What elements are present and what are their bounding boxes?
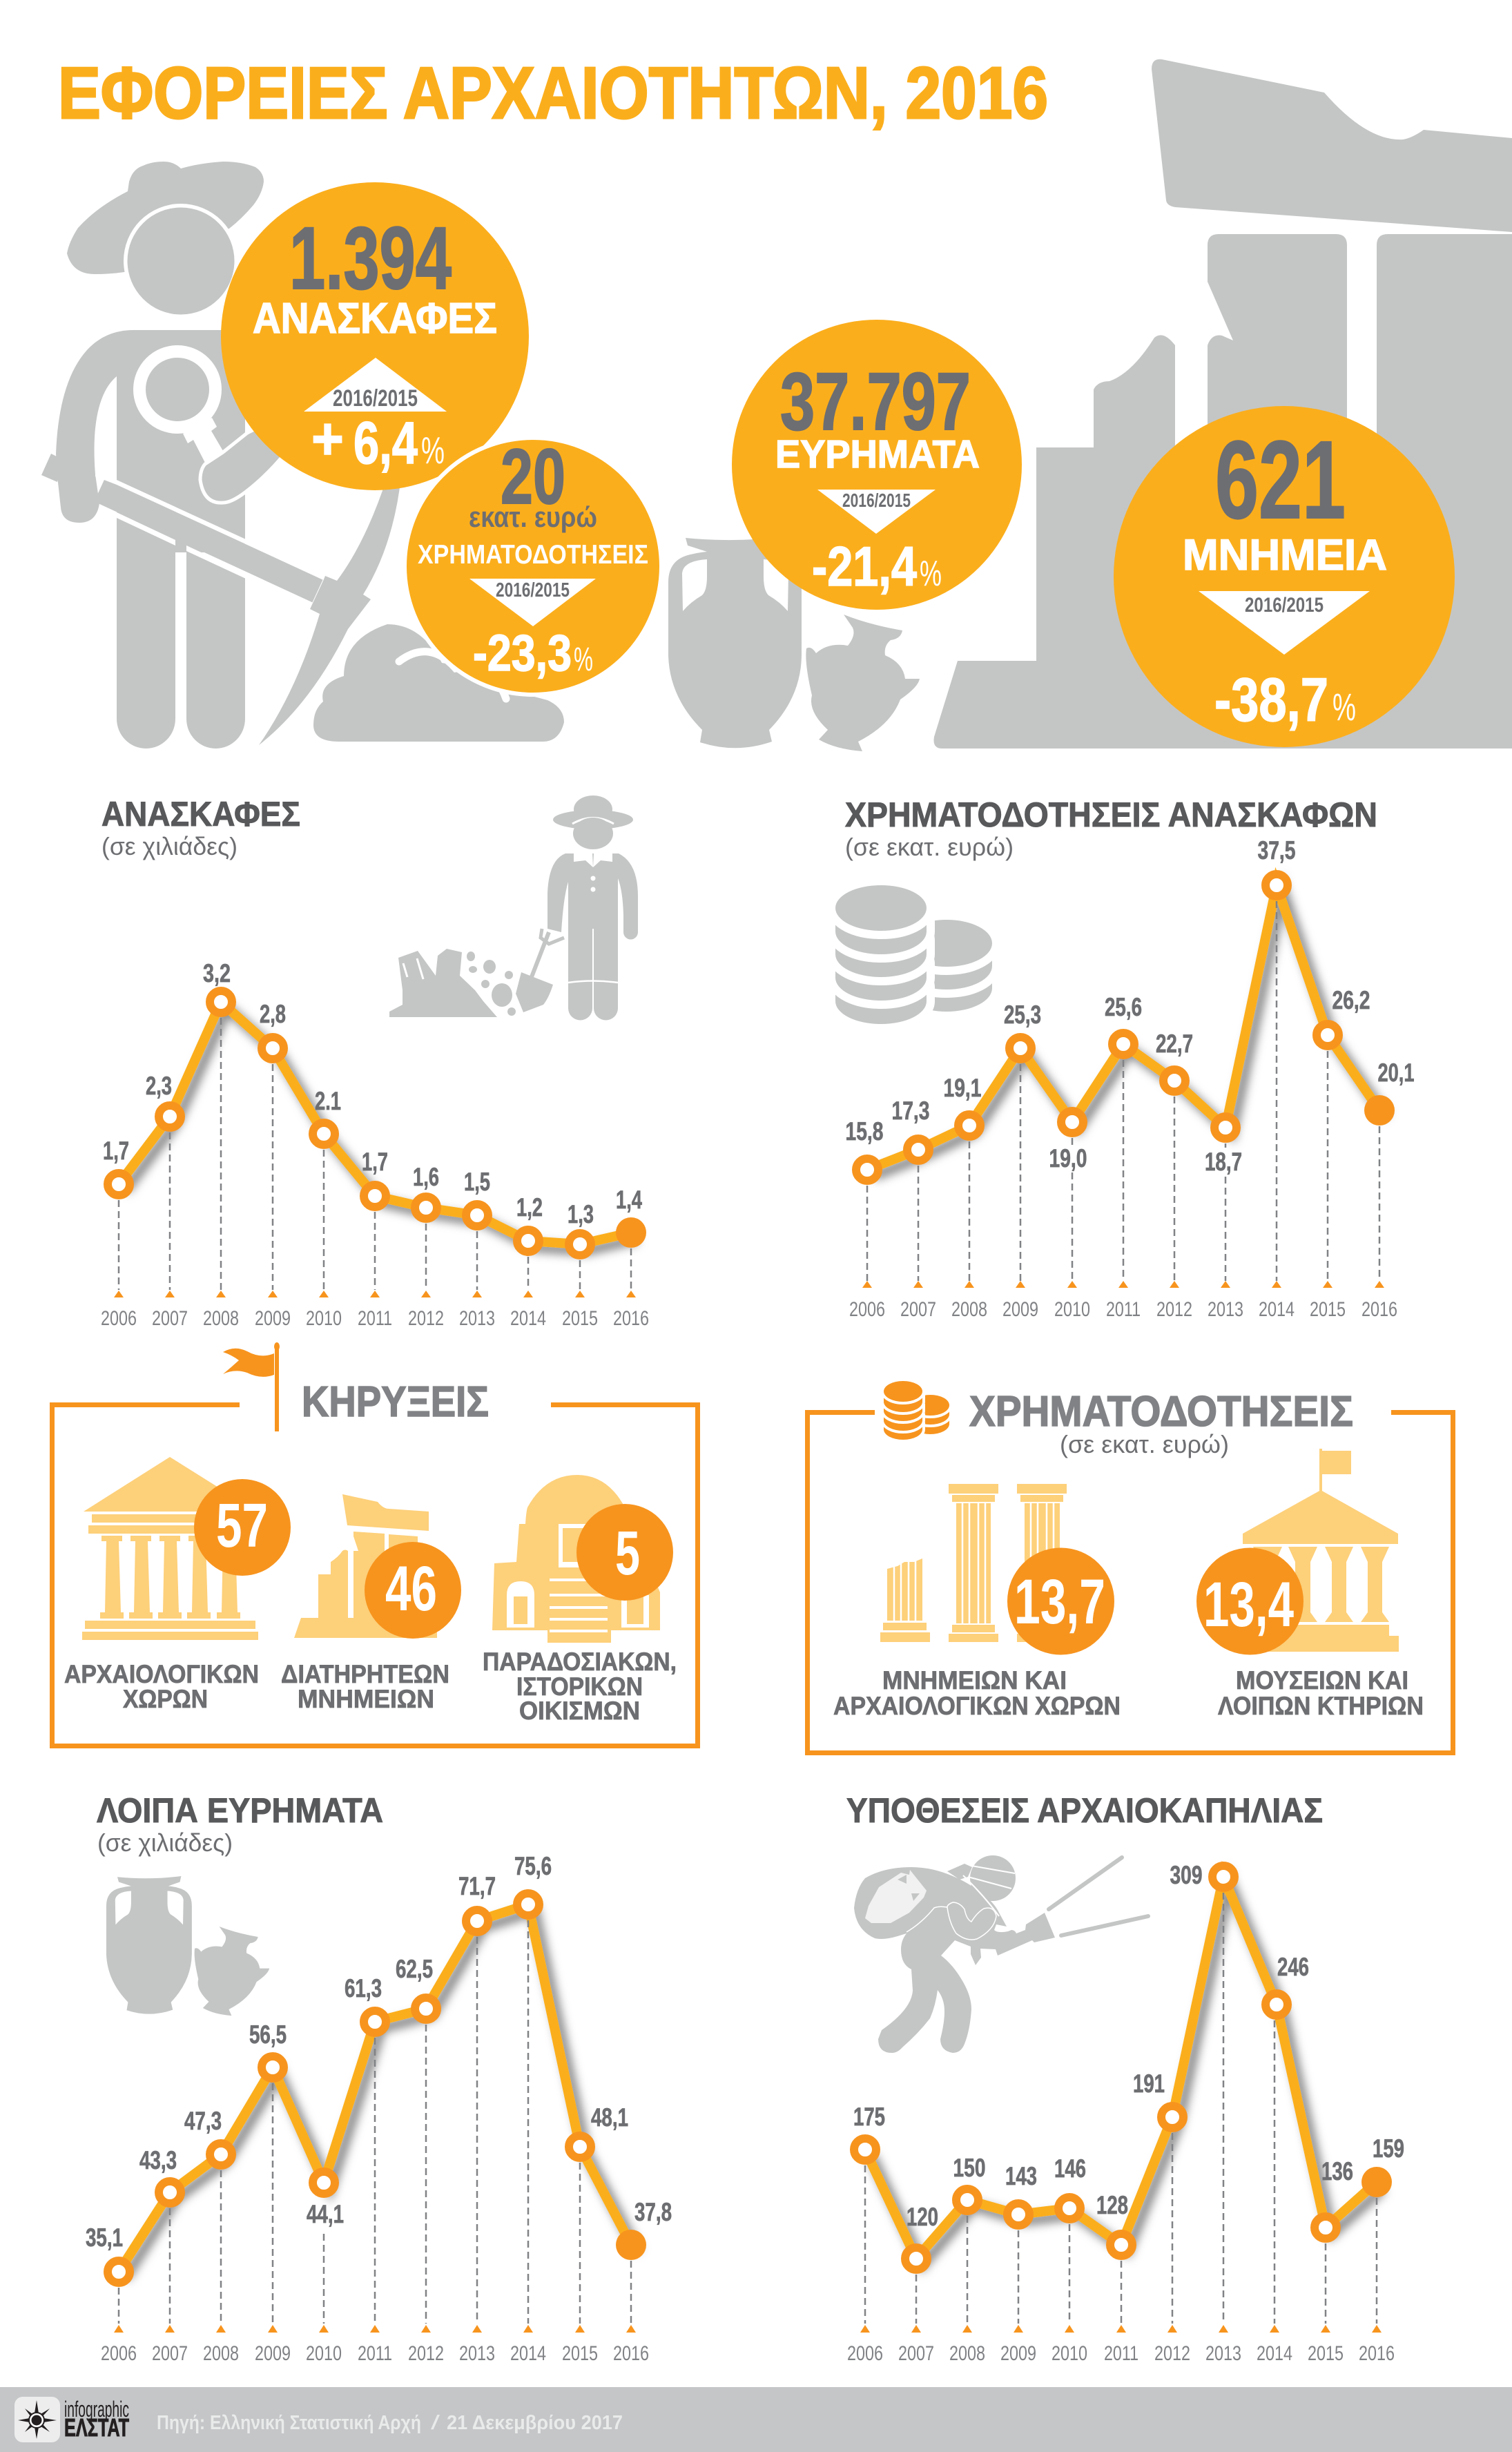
value labels: 61,3	[345, 1974, 382, 2002]
logo: ELSTAT infographic: ΕΛΣΤΑΤ	[64, 2413, 129, 2442]
year axis: 2009	[255, 2342, 291, 2365]
value labels: 146	[1054, 2154, 1086, 2183]
value labels: 1,5	[464, 1168, 490, 1196]
caption: museums and other buildings: ΜΟΥΣΕΙΩΝ ΚΑΙ	[1236, 1666, 1408, 1695]
value labels: 37,8	[634, 2198, 672, 2226]
year axis: 2010	[1051, 2342, 1087, 2365]
icon: digger with shovel	[389, 795, 638, 1021]
year axis: 2006	[847, 2342, 883, 2365]
heading: ΚΗΡΥΞΕΙΣ	[302, 1378, 489, 1426]
value labels: 120	[907, 2203, 938, 2231]
line series	[865, 1877, 1377, 2259]
line series	[119, 1904, 631, 2272]
stat circle: funding	[405, 433, 661, 695]
value labels: 309	[1170, 1861, 1203, 1889]
value labels: 47,3	[184, 2107, 222, 2135]
year axis: 2012	[408, 1307, 444, 1330]
caption: archaeological sites: ΧΩΡΩΝ	[123, 1685, 208, 1713]
badge: 46: 46	[385, 1554, 437, 1624]
year axis: 2007	[152, 2342, 188, 2365]
badge: 57	[194, 1479, 291, 1576]
icon: tilted jar	[806, 615, 920, 751]
icon: orange coins	[884, 1381, 949, 1440]
value labels: 19,0	[1049, 1144, 1087, 1172]
year axis: 2011	[358, 2342, 392, 2365]
heading: ΑΝΑΣΚΑΦΕΣ	[101, 795, 300, 833]
stat circle: finds: -21,4	[812, 536, 917, 598]
logo: ELSTAT infographic: infographic	[64, 2397, 129, 2422]
year axis: 2008	[949, 2342, 985, 2365]
stat circle: finds: ΕΥΡΗΜΑΤΑ	[775, 432, 980, 476]
value labels: 25,3	[1004, 1001, 1041, 1029]
icon: archaeologist with pickaxe	[41, 162, 401, 749]
unit note: (σε χιλιάδες)	[101, 832, 238, 860]
stat circle: monuments: %	[1332, 685, 1356, 728]
icon: museum	[1243, 1449, 1399, 1652]
year axis: 2013	[459, 1307, 495, 1330]
icon: flag	[223, 1342, 280, 1431]
year axis: 2010	[306, 2342, 342, 2365]
unit note: (σε χιλιάδες)	[97, 1828, 233, 1857]
chart: excavation funding	[835, 795, 1414, 1321]
heading: ΧΡΗΜΑΤΟΔΟΤΗΣΕΙΣ ΑΝΑΣΚΑΦΩΝ	[845, 795, 1377, 834]
icon: columns	[880, 1484, 1067, 1642]
value labels: 2,3	[146, 1072, 172, 1100]
panel: designations	[52, 1342, 697, 1746]
year axis: 2015	[1310, 1298, 1346, 1321]
badge: 5	[576, 1504, 673, 1601]
icon: temple	[82, 1457, 258, 1640]
year axis	[849, 1298, 1397, 1321]
value labels: 20,1	[1378, 1059, 1414, 1087]
value labels: 1,7	[362, 1148, 388, 1176]
year axis: 2015	[562, 1307, 598, 1330]
year axis: 2008	[203, 1307, 239, 1330]
drop lines	[119, 1920, 631, 2324]
value labels: 19,1	[943, 1074, 982, 1102]
value labels: 159	[1373, 2134, 1404, 2163]
stat circle: funding: 20	[501, 433, 565, 520]
year axis: 2015	[1308, 2342, 1344, 2365]
badge: 46	[365, 1542, 461, 1639]
year axis: 2015	[562, 2342, 598, 2365]
year axis: 2016	[613, 1307, 649, 1330]
stat circle: excavations: 1.394	[289, 209, 452, 308]
caption: traditional settlements: ΙΣΤΟΡΙΚΩΝ	[516, 1672, 643, 1701]
axis ticks	[860, 2325, 1382, 2333]
year axis: 2016	[1359, 2342, 1395, 2365]
unit note: (σε εκατ. ευρώ)	[1060, 1430, 1229, 1458]
year axis: 2012	[1154, 2342, 1190, 2365]
panel frame	[52, 1404, 697, 1746]
year axis: 2006	[101, 2342, 137, 2365]
chart: other finds	[86, 1791, 672, 2365]
year axis: 2014	[1259, 1298, 1295, 1321]
stat circle: funding: %	[574, 641, 593, 678]
axis ticks	[114, 1291, 636, 1297]
value labels: 37,5	[1258, 836, 1295, 865]
value labels: 1,6	[413, 1163, 439, 1191]
stat circle: finds: 2016/2015	[842, 490, 911, 511]
icon: tilted jar	[195, 1927, 269, 2016]
year axis: 2008	[951, 1298, 987, 1321]
value labels: 136	[1321, 2157, 1353, 2185]
badge: 5: 5	[615, 1519, 640, 1588]
markers	[108, 1893, 646, 2283]
stat circle: funding: ΧΡΗΜΑΤΟΔΟΤΗΣΕΙΣ	[418, 540, 648, 570]
caption: museums and other buildings: ΛΟΙΠΩΝ ΚΤΗΡΙΩΝ	[1218, 1692, 1424, 1720]
icon: ruined temple	[933, 59, 1512, 749]
caption: listed monuments: ΜΝΗΜΕΙΩΝ	[298, 1685, 434, 1713]
axis ticks	[862, 1281, 1384, 1288]
source line: 21 Δεκεμβρίου 2017	[447, 2412, 623, 2434]
year axis: 2011	[1106, 1298, 1141, 1321]
source line: /	[431, 2412, 441, 2434]
value labels: 35,1	[86, 2223, 123, 2252]
year axis: 2012	[408, 2342, 444, 2365]
stat circle: funding: εκατ. ευρώ	[469, 501, 597, 533]
value labels	[853, 1861, 1404, 2231]
stat circle: excavations: 6,4	[353, 410, 418, 476]
panel frame	[808, 1413, 1453, 1753]
stat circle: excavations: 2016/2015	[333, 385, 418, 412]
markers	[854, 1866, 1392, 2270]
stat circle: excavations: ΑΝΑΣΚΑΦΕΣ	[253, 295, 497, 342]
year axis: 2016	[1361, 1298, 1397, 1321]
value labels: 15,8	[845, 1117, 884, 1146]
value labels: 26,2	[1332, 986, 1370, 1014]
value labels: 1,3	[568, 1200, 594, 1228]
value labels: 56,5	[249, 2020, 287, 2049]
year axis: 2007	[900, 1298, 936, 1321]
value labels: 246	[1277, 1953, 1309, 1981]
icon: amphora	[106, 1876, 192, 2014]
year axis: 2012	[1156, 1298, 1192, 1321]
icon: ruined monument	[294, 1494, 437, 1638]
value labels: 48,1	[591, 2103, 628, 2132]
value labels: 128	[1096, 2191, 1128, 2219]
year axis: 2010	[306, 1307, 342, 1330]
caption: museums and other buildings	[1218, 1666, 1424, 1720]
caption: listed monuments: ΔΙΑΤΗΡΗΤΕΩΝ	[281, 1660, 449, 1688]
stat circle: monuments: 2016/2015	[1245, 594, 1324, 617]
year axis	[101, 1307, 649, 1330]
year axis	[847, 2342, 1395, 2365]
chart: antiquities trafficking cases	[846, 1791, 1404, 2365]
stat circle: monuments: ΜΝΗΜΕΙΑ	[1183, 531, 1387, 579]
value labels: 22,7	[1156, 1030, 1193, 1058]
icon: thief with bolt cutter and sack	[854, 1855, 1148, 2053]
year axis: 2009	[1000, 2342, 1036, 2365]
year axis: 2013	[459, 2342, 495, 2365]
stat circle: finds: %	[920, 554, 942, 594]
caption: traditional settlements: ΟΙΚΙΣΜΩΝ	[519, 1697, 640, 1725]
value labels: 75,6	[514, 1852, 552, 1880]
value labels: 1,4	[616, 1186, 642, 1214]
icon: traditional settlement house	[492, 1475, 660, 1643]
year axis: 2009	[1002, 1298, 1038, 1321]
drop lines	[867, 901, 1379, 1281]
value labels: 1,2	[516, 1193, 543, 1222]
caption: monuments and sites	[833, 1666, 1121, 1720]
caption: listed monuments	[281, 1660, 449, 1713]
stat circle: excavations: %	[421, 429, 445, 472]
value labels: 71,7	[458, 1872, 496, 1900]
icon: soil mound	[313, 624, 564, 742]
year axis: 2007	[152, 1307, 188, 1330]
year axis: 2007	[898, 2342, 934, 2365]
stat circle: monuments	[1114, 406, 1455, 747]
stat circle: excavations	[221, 182, 529, 490]
drop lines	[865, 1893, 1377, 2324]
value labels: 143	[1005, 2162, 1037, 2190]
year axis: 2006	[101, 1307, 137, 1330]
year axis: 2006	[849, 1298, 885, 1321]
source line	[157, 2412, 623, 2434]
heading: ΥΠΟΘΕΣΕΙΣ ΑΡΧΑΙΟΚΑΠΗΛΙΑΣ	[846, 1791, 1323, 1830]
source line: Πηγή: Ελληνική Στατιστική Αρχή	[157, 2412, 421, 2434]
markers	[856, 874, 1395, 1181]
year axis: 2013	[1205, 2342, 1241, 2365]
markers	[108, 991, 646, 1255]
value labels: 1,7	[103, 1137, 129, 1165]
caption: traditional settlements	[483, 1648, 677, 1725]
stat circle: funding: 2016/2015	[496, 579, 570, 601]
value labels	[845, 836, 1414, 1176]
value labels: 25,6	[1105, 993, 1142, 1021]
value labels: 44,1	[307, 2200, 344, 2228]
value labels: 150	[953, 2154, 986, 2182]
title: ΕΦΟΡΕΙΕΣ ΑΡΧΑΙΟΤΗΤΩΝ, 2016	[58, 52, 1048, 134]
badge: 13,4: 13,4	[1203, 1570, 1294, 1640]
value labels: 2,8	[260, 1000, 286, 1028]
line series	[119, 1002, 631, 1244]
heading: ΧΡΗΜΑΤΟΔΟΤΗΣΕΙΣ	[969, 1388, 1353, 1436]
year axis: 2013	[1208, 1298, 1243, 1321]
axis ticks	[114, 2325, 636, 2333]
stat circle: funding: -23,3	[473, 624, 572, 682]
year axis: 2014	[510, 2342, 546, 2365]
value labels: 3,2	[203, 959, 231, 987]
value labels	[103, 959, 642, 1228]
line series	[867, 885, 1379, 1170]
stat circle: excavations: +	[311, 406, 344, 472]
year axis	[101, 2342, 649, 2365]
year axis: 2016	[613, 2342, 649, 2365]
badge: 13,4	[1196, 1548, 1303, 1654]
year axis: 2011	[358, 1307, 392, 1330]
value labels: 17,3	[892, 1097, 929, 1125]
value labels: 191	[1133, 2069, 1165, 2098]
footer	[0, 2387, 1512, 2452]
year axis: 2014	[510, 1307, 546, 1330]
value labels: 62,5	[396, 1955, 433, 1983]
year axis: 2011	[1104, 2342, 1138, 2365]
stat circle: finds	[732, 320, 1022, 610]
stat circle: monuments: -38,7	[1214, 665, 1328, 734]
stat circle: monuments: 621	[1215, 418, 1346, 541]
year axis: 2008	[203, 2342, 239, 2365]
value labels: 175	[853, 2103, 885, 2131]
year axis: 2014	[1257, 2342, 1292, 2365]
badge: 13,7: 13,7	[1014, 1567, 1105, 1637]
year axis: 2009	[255, 1307, 291, 1330]
value labels: 18,7	[1205, 1148, 1242, 1176]
stat circle: finds: 37.797	[780, 356, 971, 447]
drop lines	[119, 1018, 631, 1290]
badge: 13,7	[1007, 1548, 1114, 1654]
unit note: (σε εκατ. ευρώ)	[845, 833, 1014, 861]
caption: archaeological sites: ΑΡΧΑΙΟΛΟΓΙΚΩΝ	[64, 1660, 259, 1688]
chart: excavations	[101, 795, 649, 1330]
value labels: 43,3	[139, 2146, 177, 2174]
caption: traditional settlements: ΠΑΡΑΔΟΣΙΑΚΩΝ,	[483, 1648, 677, 1676]
panel: fundings	[808, 1381, 1453, 1753]
logo: ELSTAT infographic	[14, 2397, 129, 2442]
badge: 57: 57	[216, 1492, 268, 1561]
caption: monuments and sites: ΜΝΗΜΕΙΩΝ ΚΑΙ	[882, 1666, 1067, 1695]
value labels	[86, 1852, 672, 2252]
value labels: 2.1	[315, 1087, 341, 1115]
icon: large amphora	[668, 537, 802, 748]
icon: coin stacks	[835, 885, 992, 1024]
heading: ΛΟΙΠΑ ΕΥΡΗΜΑΤΑ	[97, 1791, 383, 1830]
caption: archaeological sites	[64, 1660, 259, 1713]
caption: monuments and sites: ΑΡΧΑΙΟΛΟΓΙΚΩΝ ΧΩΡΩΝ	[833, 1692, 1121, 1720]
year axis: 2010	[1054, 1298, 1090, 1321]
